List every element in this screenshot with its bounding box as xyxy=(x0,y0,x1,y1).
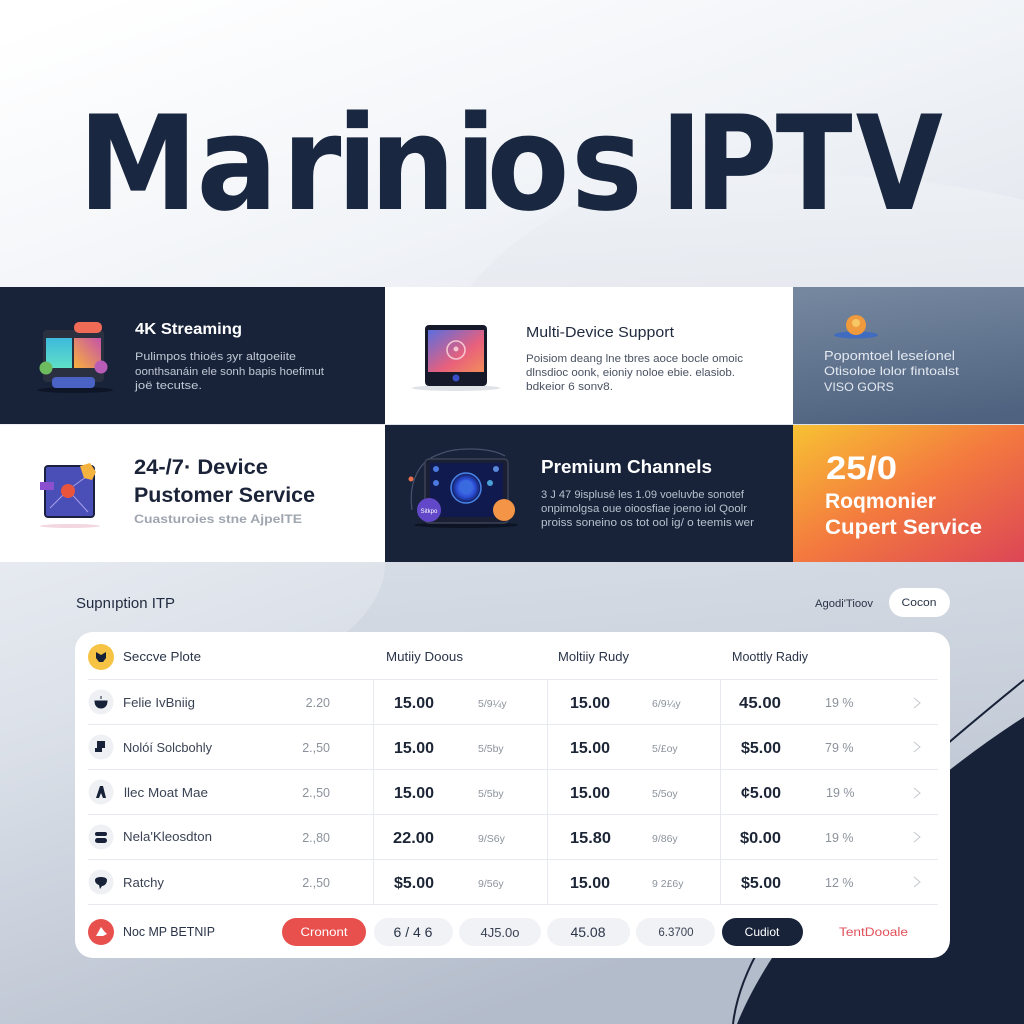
row 2: 15.00 xyxy=(570,740,610,757)
row 2: $5.00 xyxy=(741,740,781,757)
pill: 6/46: 6 / 4 6 xyxy=(394,924,433,940)
table header row: Moltiiy Rudy xyxy=(558,649,629,664)
service text: Cupert Service xyxy=(825,516,982,539)
row 5: Ratchy xyxy=(123,875,164,890)
body text: proiss soneino os tot ool ig/ o teemis wer xyxy=(541,517,754,529)
icon: tablet xyxy=(412,325,500,391)
heading: 24-/7· Device xyxy=(134,456,268,479)
row 5: 15.00 xyxy=(570,875,610,892)
heading: Premium Channels xyxy=(541,457,712,477)
row 5: $5.00 xyxy=(394,875,434,892)
body text xyxy=(824,348,960,394)
row 1: 5/9¼y xyxy=(478,698,507,710)
row 3: llec Moat Mae xyxy=(124,785,208,800)
row 4: 22.00 xyxy=(393,830,434,847)
row 3: 15.00 xyxy=(570,785,610,802)
row 4: 2.,80 xyxy=(302,831,330,845)
table header row: Seccve Plote xyxy=(123,649,201,664)
row 1: 45.00 xyxy=(739,695,781,712)
table header row: Mutiiy Doous xyxy=(386,649,464,664)
pill: 435.00 xyxy=(459,918,541,946)
body text: Popomtoel leseíonel xyxy=(824,348,955,363)
service text xyxy=(825,490,982,539)
row 1: 15.00 xyxy=(394,695,434,712)
footer row xyxy=(88,918,908,946)
body text: Poisiom deang lne tbres aoce bocle omoic xyxy=(526,353,744,365)
row 5: 12 % xyxy=(825,876,854,890)
row 2: 5/5by xyxy=(478,743,504,755)
pill: 6/46 xyxy=(374,918,453,946)
panel: 4K Streaming xyxy=(0,287,385,424)
pill: 45.08: 45.08 xyxy=(570,924,606,940)
body text: 3 J 47 9isplusé les 1.09 voeluvbe sonotef xyxy=(541,489,745,501)
row 2: 15.00 xyxy=(394,740,434,757)
title: IPTV xyxy=(660,88,943,240)
row 1: 19 % xyxy=(825,696,854,710)
table header row: Moottly Radiy xyxy=(732,649,808,664)
red link: TentDooale xyxy=(839,927,908,939)
row 1: 15.00 xyxy=(570,695,610,712)
body text: VISO GORS xyxy=(824,380,894,394)
pill: 6.3700 xyxy=(636,918,715,946)
row 2: 5/£oy xyxy=(652,743,678,755)
heading: Pustomer Service xyxy=(134,484,315,507)
pill: 45.08 xyxy=(547,918,630,946)
row 4: 15.80 xyxy=(570,830,611,847)
big number: 25/0 xyxy=(826,450,897,486)
panel: Multi-Device Support xyxy=(385,287,793,424)
row 4: 19 % xyxy=(825,831,854,845)
row 5: 2.,50 xyxy=(302,876,330,890)
button: dark xyxy=(722,918,803,946)
subtitle: Cuasturoies stne AjpelTE xyxy=(134,512,302,526)
body text: dlnsdioc oonk, eioniy noloe ebie. elasiob. xyxy=(526,367,735,379)
icon: orange globe xyxy=(834,315,878,338)
row 3: 5/5oy xyxy=(652,788,678,800)
row 2: Nolóí Solcbohly xyxy=(123,740,212,755)
icon: streaming screens xyxy=(37,322,113,393)
heading xyxy=(134,456,315,507)
button: dark: Cudiot xyxy=(745,925,780,939)
table header row xyxy=(88,644,808,670)
body text: Otisoloe lolor fintoalst xyxy=(824,364,960,378)
heading: 4K Streaming xyxy=(135,321,242,338)
button: red: Cronont xyxy=(300,925,348,939)
panel: Premium Channels xyxy=(385,425,793,562)
row 5: 9/56y xyxy=(478,878,504,890)
icon: service tablet xyxy=(40,463,100,528)
row 3: 19 % xyxy=(826,786,854,800)
button: coupon xyxy=(889,588,950,617)
title xyxy=(78,87,943,240)
row 3: 15.00 xyxy=(394,785,434,802)
body text: onpimolgsa oue oioosfiae joeno iol Qoolr xyxy=(541,503,747,515)
heading: Multi-Device Support xyxy=(526,324,675,341)
body text: bdkeior 6 sonv8. xyxy=(526,381,613,393)
row 1 xyxy=(88,690,920,714)
row 2: 79 % xyxy=(825,741,854,755)
row 5 xyxy=(88,870,920,894)
table card xyxy=(75,632,950,958)
row 4 xyxy=(88,824,920,850)
panel: 24/7 Device xyxy=(0,425,385,562)
footer row: Noc MP BETNIP xyxy=(123,924,215,939)
row 2 xyxy=(88,734,920,760)
row 2: 2.,50 xyxy=(302,741,330,755)
button: coupon: Cocon xyxy=(902,597,936,609)
row 4: $0.00 xyxy=(740,830,781,847)
pill: 6.3700: 6.3700 xyxy=(658,927,694,939)
body text: Pulimpos thioës ȝyr altgoeiite xyxy=(135,351,296,363)
row 3: ¢5.00 xyxy=(741,785,781,802)
body text xyxy=(526,353,744,393)
panel: 25/0 xyxy=(793,425,1024,562)
pill: 435.00: 4J5.0o xyxy=(480,925,520,940)
body text: joë tecutse. xyxy=(134,380,202,392)
icon: premium tablet xyxy=(408,449,518,528)
panel: Popomtoel xyxy=(793,287,1024,424)
row 4: 9/S6y xyxy=(478,833,506,845)
row 3 xyxy=(88,780,920,804)
row 1: 6/9¼y xyxy=(652,698,681,710)
icon: premium tablet: Sitkpo xyxy=(421,509,438,515)
row 5: 9 2£6y xyxy=(652,878,684,890)
title: Marinios xyxy=(78,87,643,240)
body text xyxy=(541,489,754,529)
body text xyxy=(134,351,324,392)
row 4: Nela'Kleosdton xyxy=(123,829,212,844)
row 1: Felie IvBniig xyxy=(123,695,195,710)
row 3: 2.,50 xyxy=(302,786,330,800)
filter label: Agodi'Tioov xyxy=(815,598,874,610)
row 1: 2.20 xyxy=(306,696,330,710)
table heading: Supnıption ITP xyxy=(76,596,175,612)
button: red xyxy=(282,918,366,946)
row 3: 5/5by xyxy=(478,788,504,800)
row 4: 9/86y xyxy=(652,833,678,845)
service text: Roqmonier xyxy=(825,490,936,513)
decorative dark corner shape xyxy=(733,680,1024,1024)
body text: oonthsanáin ele sonh bapis hoefimut xyxy=(135,366,324,378)
row 5: $5.00 xyxy=(741,875,781,892)
